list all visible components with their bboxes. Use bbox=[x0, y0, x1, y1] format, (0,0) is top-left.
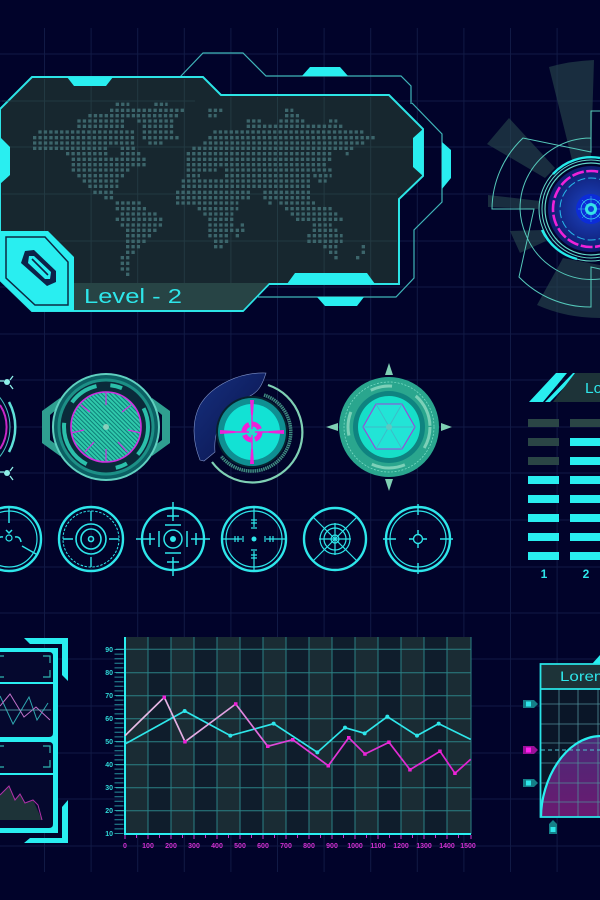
radar core bbox=[576, 194, 600, 224]
radar disc bbox=[547, 165, 600, 253]
y axis labels: 70 bbox=[105, 693, 113, 700]
x axis labels: 800 bbox=[303, 843, 315, 850]
dim bars bbox=[528, 419, 600, 465]
frame tabs bbox=[302, 67, 451, 306]
curve line bbox=[541, 736, 600, 817]
frame bbox=[540, 664, 600, 817]
outer arc bbox=[212, 385, 302, 482]
x axis labels: 400 bbox=[211, 843, 223, 850]
cyan arcs bbox=[542, 157, 600, 259]
x axis labels: 1000 bbox=[347, 843, 363, 850]
tabs on panel bbox=[0, 77, 423, 284]
plot background bbox=[125, 637, 471, 834]
y axis labels: 90 bbox=[105, 647, 113, 654]
radar wedges bbox=[487, 60, 600, 318]
alternating bands bbox=[125, 637, 471, 834]
level bar bbox=[74, 283, 269, 310]
hatched disc bbox=[71, 392, 141, 462]
lit bars bbox=[528, 438, 600, 560]
panel: world map frame bbox=[0, 53, 451, 311]
reticle row bbox=[0, 502, 453, 576]
boxes bbox=[0, 652, 53, 828]
reticle 5 bbox=[304, 508, 366, 570]
dial: hexagon compass bbox=[326, 363, 452, 491]
x axis labels: 200 bbox=[165, 843, 177, 850]
markers bbox=[523, 700, 557, 834]
x ticks bbox=[125, 835, 471, 839]
x axis labels: 100 bbox=[142, 843, 154, 850]
y axis labels: 30 bbox=[105, 785, 113, 792]
panel: mini charts bbox=[0, 638, 68, 843]
blue wing bbox=[194, 373, 266, 461]
magenta ring bbox=[553, 171, 600, 247]
y axis labels: 20 bbox=[105, 808, 113, 815]
reticle 1 bbox=[0, 507, 41, 571]
panel frame bbox=[0, 648, 58, 833]
top triangle bbox=[592, 655, 600, 664]
magenta crosshair bbox=[220, 400, 284, 464]
header bar bbox=[553, 373, 600, 402]
dotted world map bbox=[33, 104, 376, 274]
badge icon bbox=[0, 231, 74, 311]
axes bbox=[124, 637, 471, 835]
dashed ring bbox=[560, 178, 600, 240]
x axis labels: 1200 bbox=[393, 843, 409, 850]
cyan series bbox=[125, 709, 471, 754]
area chart bbox=[0, 786, 42, 820]
main panel bbox=[0, 77, 423, 311]
corner brackets bbox=[24, 638, 68, 843]
x axis labels: 1400 bbox=[439, 843, 455, 850]
header bbox=[540, 664, 600, 689]
x axis labels: 500 bbox=[234, 843, 246, 850]
x axis labels: 1300 bbox=[416, 843, 432, 850]
magenta series bbox=[125, 697, 471, 773]
box corners bbox=[0, 656, 50, 767]
y axis labels bbox=[105, 647, 113, 838]
filled curve bbox=[541, 736, 600, 817]
x axis labels: 700 bbox=[280, 843, 292, 850]
chart: curve panel bbox=[523, 655, 600, 834]
radar outline bbox=[492, 111, 600, 307]
zigzag lines bbox=[0, 696, 48, 724]
x axis labels: 1500 bbox=[460, 843, 476, 850]
y axis labels: 50 bbox=[105, 739, 113, 746]
x axis labels: 1100 bbox=[370, 843, 386, 850]
small node icons bbox=[0, 376, 13, 480]
reticle 2 bbox=[59, 507, 123, 571]
x axis labels: 600 bbox=[257, 843, 269, 850]
level label: Level - 2 bbox=[84, 286, 182, 308]
panel: level bars bbox=[528, 373, 600, 581]
x axis labels: 900 bbox=[326, 843, 338, 850]
lugs bbox=[42, 398, 170, 456]
plot bbox=[540, 689, 600, 817]
hexagon bbox=[363, 404, 415, 449]
chart: line chart bbox=[105, 637, 476, 850]
x axis labels bbox=[123, 843, 476, 850]
reticle 4 bbox=[221, 506, 287, 572]
y axis labels: 60 bbox=[105, 716, 113, 723]
y axis labels: 40 bbox=[105, 762, 113, 769]
y axis labels: 10 bbox=[105, 831, 113, 838]
dial: hatched lens bbox=[42, 374, 170, 480]
reticle 6 bbox=[383, 504, 453, 574]
panel: level bars: 2 bbox=[583, 567, 590, 581]
y ticks bbox=[114, 649, 124, 834]
y axis labels: 80 bbox=[105, 670, 113, 677]
compass points bbox=[326, 363, 452, 491]
back frame outline bbox=[180, 53, 442, 297]
header label: Lorem bbox=[560, 668, 600, 684]
dashed level bbox=[541, 749, 600, 751]
radar dial bbox=[487, 60, 600, 318]
x axis labels: 0 bbox=[123, 843, 127, 850]
dial: left partial bbox=[0, 376, 15, 480]
x axis labels: 300 bbox=[188, 843, 200, 850]
reticle 3 bbox=[136, 502, 210, 576]
header stripes bbox=[529, 373, 578, 402]
turquoise disc bbox=[216, 396, 288, 468]
dial: crosshair with blue wing bbox=[194, 373, 302, 482]
bar numbers: 1 bbox=[541, 567, 548, 581]
